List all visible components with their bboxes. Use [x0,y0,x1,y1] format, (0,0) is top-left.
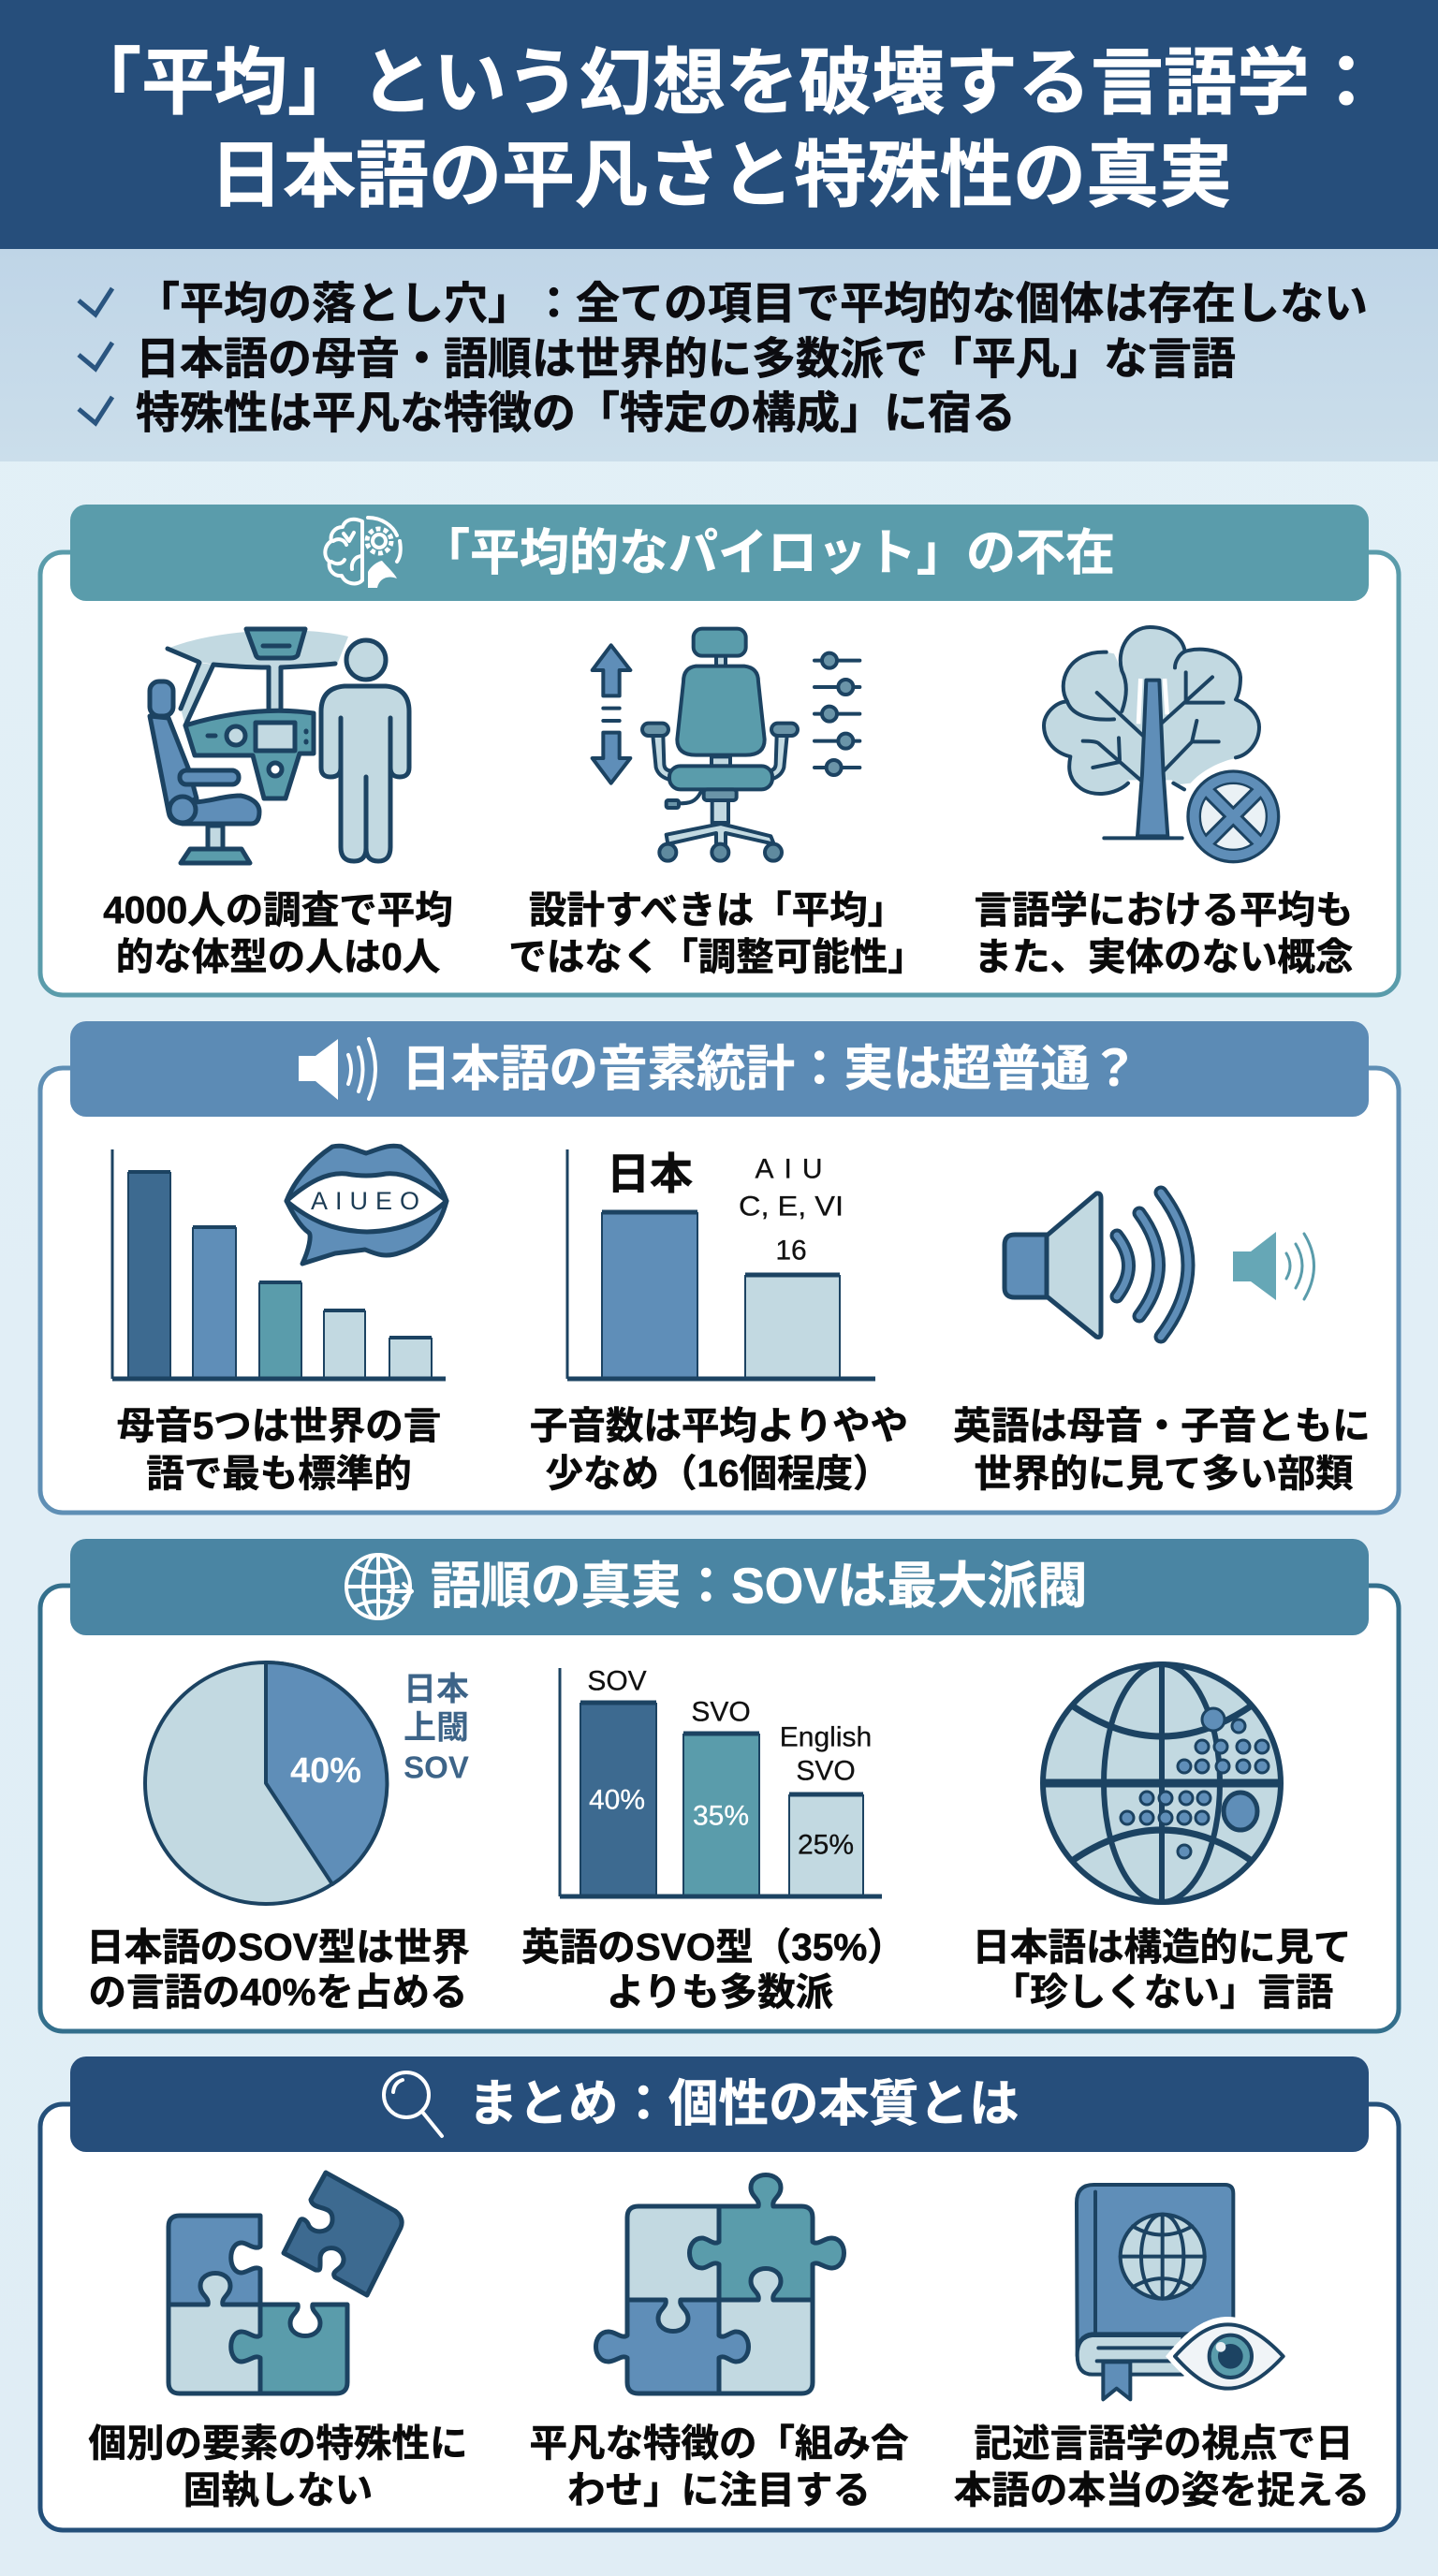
caption: chair: ではなく「調整可能性」 [508,935,926,978]
panel heading: phoneme statistics: 日本語の音素統計：実は超普通？ [402,1041,1139,1097]
caption: puzzle parts: 個別の要素の特殊性に [88,2422,468,2465]
panel heading: summary [70,2056,1369,2152]
chart: word order bars: 25% [798,1829,854,1861]
icon: magnifier [384,2072,442,2136]
caption: pilot: 4000人の調査で平均 [103,888,453,931]
caption: consonants [530,1404,908,1495]
caption: puzzle parts [88,2422,468,2511]
caption: vowels: 母音5つは世界の言 [117,1404,441,1447]
key points band [0,249,1438,461]
caption: SOV share: の言語の40%を占める [88,1970,468,2013]
caption: puzzle parts: 固執しない [183,2468,373,2511]
icon: brain and gear [325,518,401,588]
caption: combination: 平凡な特徴の「組み合 [530,2422,908,2465]
panel: word order [40,1539,1399,2031]
caption: combination: わせ」に注目する [567,2468,871,2511]
chart: word order bars [560,1666,882,1896]
caption: vowels [117,1404,441,1495]
caption: tree: また、実体のない概念 [974,935,1354,978]
panel: summary [40,2056,1399,2530]
icon: world globe with dots [1043,1664,1281,1902]
chart: word order bars: 40% [589,1784,645,1816]
icon: pilot cockpit and person [150,629,409,863]
panel: average pilot [40,505,1399,995]
panel heading: summary: まとめ：個性の本質とは [468,2076,1019,2132]
panel heading: average pilot [70,505,1369,601]
icon: assembled puzzle [595,2175,844,2393]
title banner: 「平均」という幻想を破壊する言語学： [68,41,1383,124]
chart: word order bars: English [780,1722,872,1752]
chart: word order bars: SVO [691,1696,751,1728]
chart: word order bars: SVO [796,1756,856,1786]
caption: descriptive linguistics: 本語の本当の姿を捉える [954,2468,1370,2511]
panel heading: phoneme statistics [70,1021,1369,1117]
icon: big and small speakers [1005,1193,1314,1337]
caption: pilot [103,888,453,978]
panel: phoneme statistics [40,1021,1399,1513]
pie legend: 日本 [404,1672,469,1707]
chart: SOV pie [145,1662,469,1904]
chart: word order bars: 35% [693,1801,749,1831]
title banner [0,0,1438,249]
panel heading: word order [70,1539,1369,1635]
caption: chair [508,888,926,978]
caption: combination [530,2422,908,2511]
icon: adjustable chair [593,629,859,861]
icon: tree with cross [1044,627,1283,866]
chart: vowel bars [112,1149,446,1379]
caption: pilot: 的な体型の人は0人 [116,935,440,978]
caption: not rare: 日本語は構造的に見て [972,1925,1352,1969]
chart: consonant bars: C, E, VI [739,1191,844,1222]
panel heading: average pilot: 「平均的なパイロット」の不在 [420,526,1115,580]
pie legend: 上閾 [404,1709,469,1747]
caption: consonants: 少なめ（16個程度） [545,1452,891,1495]
icon: puzzle with detached piece [169,2173,402,2393]
chart: consonant bars: AIU [755,1153,833,1185]
caption: consonants: 子音数は平均よりやや [530,1404,908,1447]
icon: speaker [299,1039,375,1100]
caption: SOV share: 日本語のSOV型は世界 [86,1925,470,1969]
icon: mouth speech bubble AIUEO: AIUEO [311,1187,427,1215]
chart: SOV pie: 40% [290,1751,361,1791]
bullet 3: 特殊性は平凡な特徴の「特定の構成」に宿る [136,388,1016,438]
chart: word order bars: SOV [587,1666,647,1696]
chart: consonant bars: 16 [775,1236,807,1266]
pie legend: SOV [404,1750,469,1784]
bullet 2: 日本語の母音・語順は世界的に多数派で「平凡」な言語 [136,333,1236,384]
caption: SVO comparison: よりも多数派 [607,1970,833,2013]
icon: globe with arrow [346,1555,412,1618]
caption: tree [974,888,1354,978]
chart: consonant bars [567,1149,875,1379]
panel heading: word order: 語順の真実：SOVは最大派閥 [431,1559,1087,1614]
caption: SVO comparison [521,1925,905,2013]
pie legend [404,1672,469,1784]
caption: English [953,1404,1371,1495]
chart: consonant bars: 日本 [607,1149,693,1198]
caption: descriptive linguistics [954,2422,1370,2511]
icon: mouth speech bubble AIUEO [286,1146,447,1264]
caption: vowels: 語で最も標準的 [146,1452,412,1495]
caption: SOV share [86,1925,470,2013]
icon: book with globe and eye [1077,2185,1290,2399]
caption: English: 英語は母音・子音ともに [953,1404,1371,1447]
caption: tree: 言語学における平均も [974,888,1354,931]
caption: not rare: 「珍しくない」言語 [992,1970,1333,2013]
caption: descriptive linguistics: 記述言語学の視点で日 [974,2422,1354,2465]
bullet 1: 「平均の落とし穴」：全ての項目で平均的な個体は存在しない [136,279,1368,328]
caption: English: 世界的に見て多い部類 [974,1452,1354,1495]
caption: chair: 設計すべきは「平均」 [529,888,905,931]
caption: SVO comparison: 英語のSVO型（35%） [521,1925,905,1969]
caption: not rare [972,1925,1352,2013]
title banner: 日本語の平凡さと特殊性の真実 [210,134,1232,216]
